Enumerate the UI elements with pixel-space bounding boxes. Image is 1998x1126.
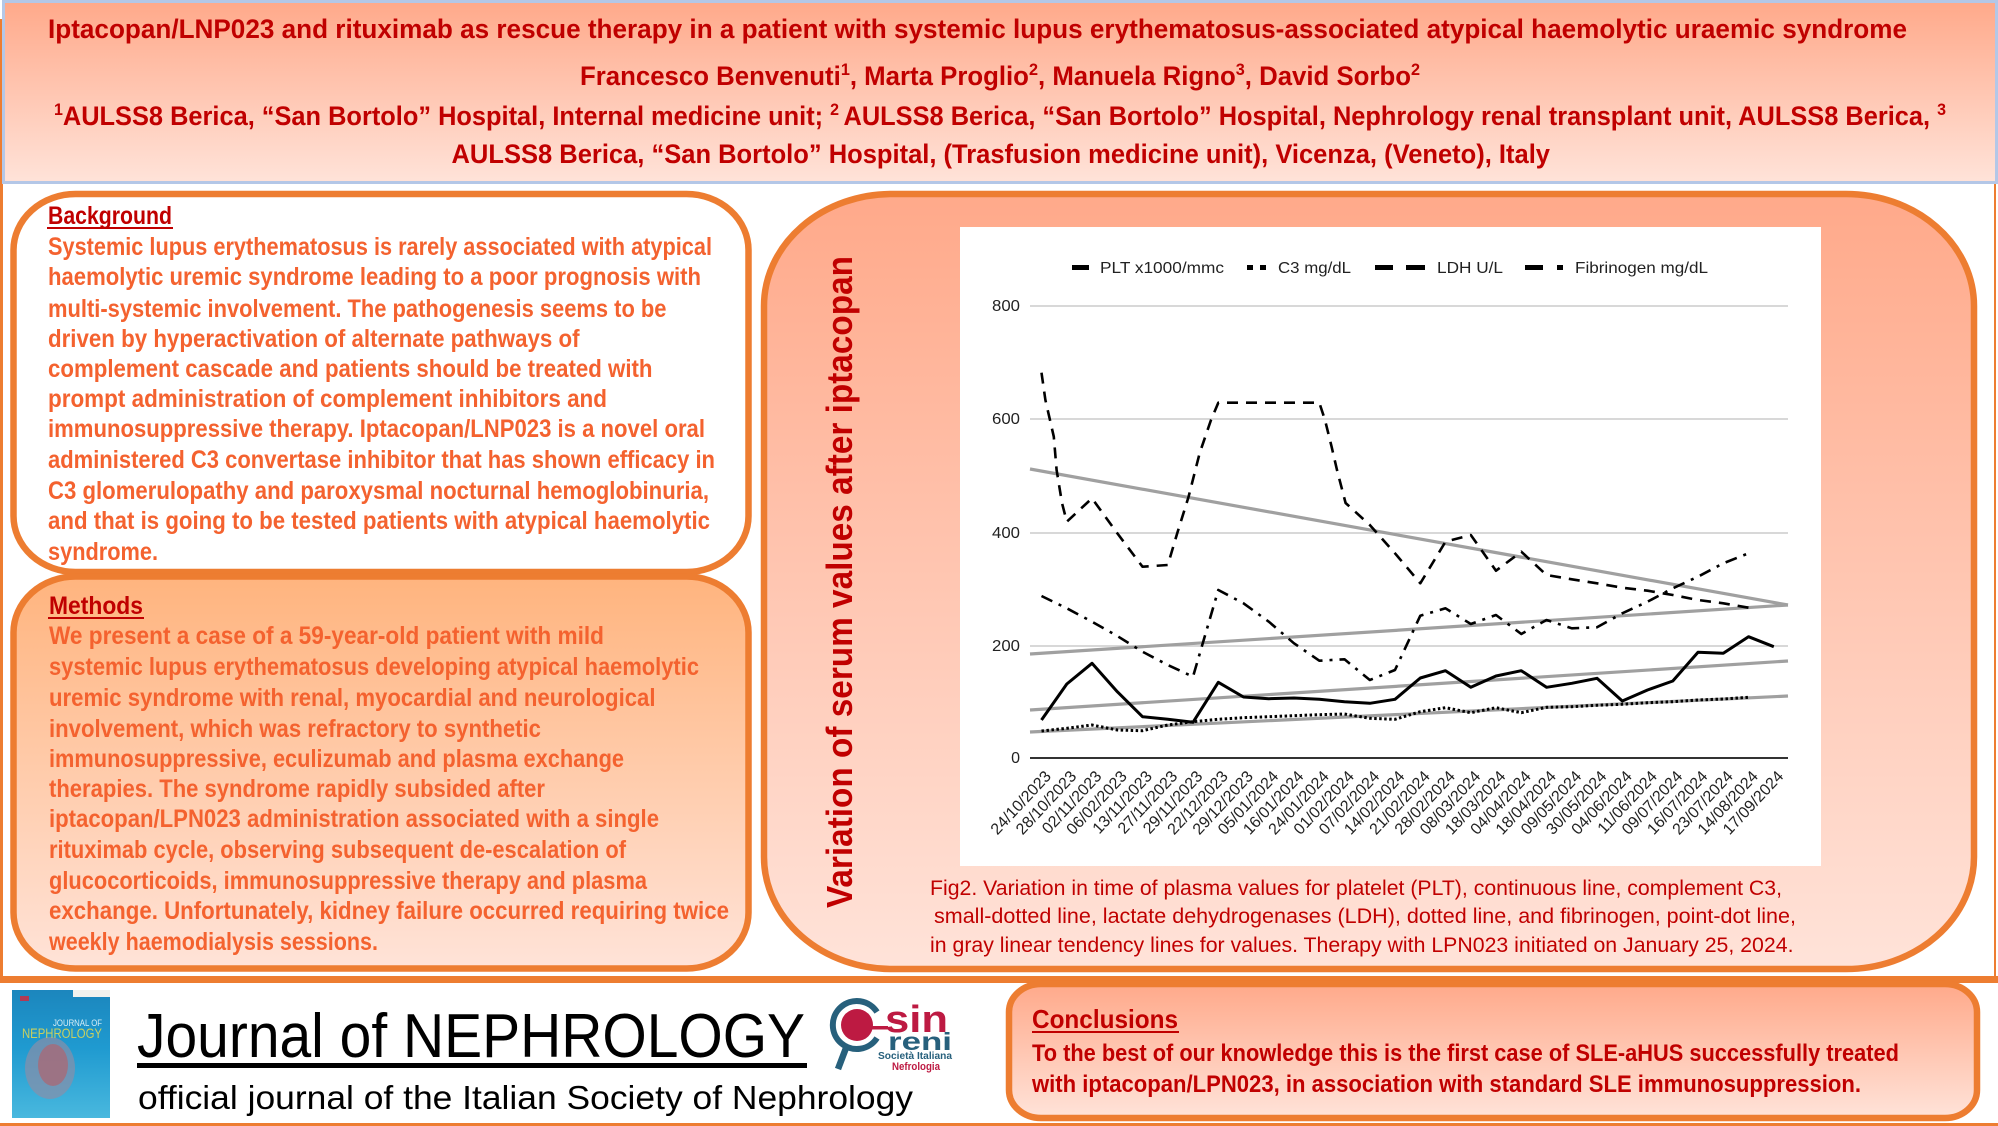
y axis labels [992,298,1020,767]
text block: background: complement cascade and patients should be treated with [48,355,652,383]
line chart [960,227,1821,866]
text block: background: Systemic lupus erythematosus is rarely associated with atypical [48,233,712,261]
x axis date labels: 30/05/2024 [1543,768,1610,838]
text block: background: and that is going to be tested patients with atypical haemolytic [48,507,710,535]
title: Iptacopan/LNP023 and rituximab as rescue therapy in a patient with systemic lupus erythematosus-associated atypical haemolytic uraemic syndrome [48,14,1907,44]
x axis date labels: 28/10/2023 [1013,768,1080,838]
authors: 2 [1411,60,1420,79]
text block: methods: weekly haemodialysis sessions. [48,928,378,956]
text block: background: driven by hyperactivation of alternate pathways of [48,325,580,353]
authors: , David Sorbo [1245,61,1411,91]
legend [1072,260,1708,277]
x axis date labels: 01/02/2024 [1291,768,1358,838]
header panel [4,2,1996,182]
x axis date labels: 18/03/2024 [1442,768,1509,838]
x axis date labels: 16/01/2024 [1240,768,1307,838]
figure caption [930,877,1796,957]
series: C3 [1042,697,1748,731]
text block: background: prompt administration of complement inhibitors and [48,385,607,413]
legend: C3 mg/dL [1278,260,1351,277]
text block: methods: systemic lupus erythematosus developing atypical haemolytic [49,653,699,681]
text block: methods: uremic syndrome with renal, myocardial and neurological [49,684,656,712]
journal name: Journal of NEPHROLOGY [137,1002,805,1071]
series: fibrinogen [1042,553,1748,680]
x axis date labels: 08/03/2024 [1417,768,1484,838]
text block: methods: glucocorticoids, immunosuppressive therapy and plasma [49,867,648,895]
text block: background [48,233,715,566]
affiliations line 1: AULSS8 Berica, “San Bortolo” Hospital, Nephrology renal transplant unit, AULSS8 Berica, [844,101,1937,131]
text block: background: syndrome. [48,538,158,566]
panel: methods [14,576,748,968]
text block: background: haemolytic uremic syndrome leading to a poor prognosis with [48,263,701,291]
journal cover image [12,990,110,1118]
x axis date labels: 22/12/2023 [1165,768,1232,838]
text block: conclusions [1031,1040,1899,1098]
x axis date labels: 16/07/2024 [1644,768,1711,838]
text block: background: C3 glomerulopathy and paroxysmal nocturnal hemoglobinuria, [48,477,709,505]
panel: chart [764,194,1974,969]
panel: background [14,194,748,572]
text block: methods: therapies. The syndrome rapidly subsided after [49,775,545,803]
logo: SIN: sin [885,999,948,1041]
x axis date labels: 24/01/2024 [1266,768,1333,838]
x axis date labels: 02/11/2023 [1039,768,1105,837]
text block: methods: involvement, which was refractory to synthetic [49,715,541,743]
heading: conclusions: Conclusions [1032,1004,1178,1034]
authors: Francesco Benvenuti [580,61,853,91]
x axis date labels: 27/11/2023 [1115,768,1181,837]
logo: SIN: reni [888,1028,952,1056]
legend: PLT x1000/mmc [1100,260,1224,277]
series: platelets [1042,637,1774,722]
affiliations line 1: 2 [830,100,844,119]
text block: background: multi-systemic involvement. The pathogenesis seems to be [48,295,667,323]
trend lines [1030,469,1788,732]
journal subtitle: official journal of the Italian Society of Nephrology [138,1079,914,1116]
x axis date labels: 05/01/2024 [1215,768,1282,838]
x axis date labels: 23/07/2024 [1670,768,1737,838]
x axis date labels: 24/10/2023 [988,768,1055,838]
text block: background: immunosuppressive therapy. Iptacopan/LNP023 is a novel oral [48,415,705,443]
figure caption: small-dotted line, lactate dehydrogenases (LDH), dotted line, and fibrinogen, point-dot line, [934,905,1796,928]
x axis date labels: 09/07/2024 [1619,768,1686,838]
x axis date labels: 14/08/2024 [1695,768,1762,838]
x axis date labels: 04/04/2024 [1468,768,1535,838]
text block: conclusions: To the best of our knowledge this is the first case of SLE-aHUS successfully treated [1032,1040,1899,1067]
affiliations line 1: 1 [54,100,63,119]
x axis date labels: 29/11/2023 [1140,768,1206,837]
text block: methods: iptacopan/LPN023 administration associated with a single [49,805,659,833]
logo: SIN [833,999,952,1073]
x axis date labels [988,768,1787,838]
x axis date labels: 11/06/2024 [1595,768,1661,837]
y axis labels: 600 [992,411,1020,428]
heading: methods: Methods [49,592,143,620]
x axis date labels: 13/11/2023 [1090,768,1156,837]
authors: , Manuela Rigno [1038,61,1236,91]
journal cover image: JOURNAL OF [53,1018,102,1028]
affiliations line 1: AULSS8 Berica, “San Bortolo” Hospital, Internal medicine unit; [63,101,830,131]
authors: 1 [841,60,850,79]
affiliations line 1: 3 [1937,100,1946,119]
legend: LDH U/L [1437,260,1503,277]
text block: methods: exchange. Unfortunately, kidney failure occurred requiring twice [49,897,729,925]
heading: background: Background [48,202,172,230]
x axis date labels: 09/05/2024 [1518,768,1585,838]
journal cover image: NEPHROLOGY [22,1025,103,1041]
text block: methods [48,622,729,956]
x axis date labels: 29/12/2023 [1190,768,1257,838]
panel: conclusions [1009,984,1977,1118]
x axis date labels: 21/02/2024 [1367,768,1434,838]
authors: 3 [1236,60,1245,79]
text block: conclusions: with iptacopan/LPN023, in association with standard SLE immunosuppression. [1031,1071,1861,1098]
logo: SIN: Nefrologia [892,1061,941,1073]
x axis date labels: 06/02/2023 [1064,768,1131,838]
y axis labels: 200 [992,638,1020,655]
affiliations line 2: AULSS8 Berica, “San Bortolo” Hospital, (Trasfusion medicine unit), Vicenza, (Veneto), Italy [452,139,1550,169]
y axis labels: 0 [1011,750,1020,767]
x axis date labels: 17/09/2024 [1720,768,1787,838]
logo: SIN: Società Italiana [878,1051,952,1062]
rotated heading: variation of serum values: Variation of serum values after iptacopan [819,256,860,908]
x axis date labels: 28/02/2024 [1392,768,1459,838]
text block: methods: rituximab cycle, observing subsequent de-escalation of [49,836,627,864]
figure caption: in gray linear tendency lines for values. Therapy with LPN023 initiated on January 25, 2024. [930,934,1794,957]
x axis date labels: 14/02/2024 [1341,768,1408,838]
text block: methods: immunosuppressive, eculizumab and plasma exchange [49,745,624,773]
series: LDH [1042,373,1748,608]
authors: , Marta Proglio [850,61,1029,91]
x axis date labels: 07/02/2024 [1316,768,1383,838]
y axis labels: 800 [992,298,1020,315]
authors: 2 [1029,60,1038,79]
x axis date labels: 04/06/2024 [1569,768,1636,838]
text block: methods: We present a case of a 59-year-old patient with mild [49,622,604,650]
figure caption: Fig2. Variation in time of plasma values for platelet (PLT), continuous line, complement C3, [930,877,1782,900]
y axis labels: 400 [992,525,1020,542]
legend: Fibrinogen mg/dL [1575,260,1708,277]
x axis date labels: 18/04/2024 [1493,768,1560,838]
text block: background: administered C3 convertase inhibitor that has shown efficacy in [48,446,715,474]
